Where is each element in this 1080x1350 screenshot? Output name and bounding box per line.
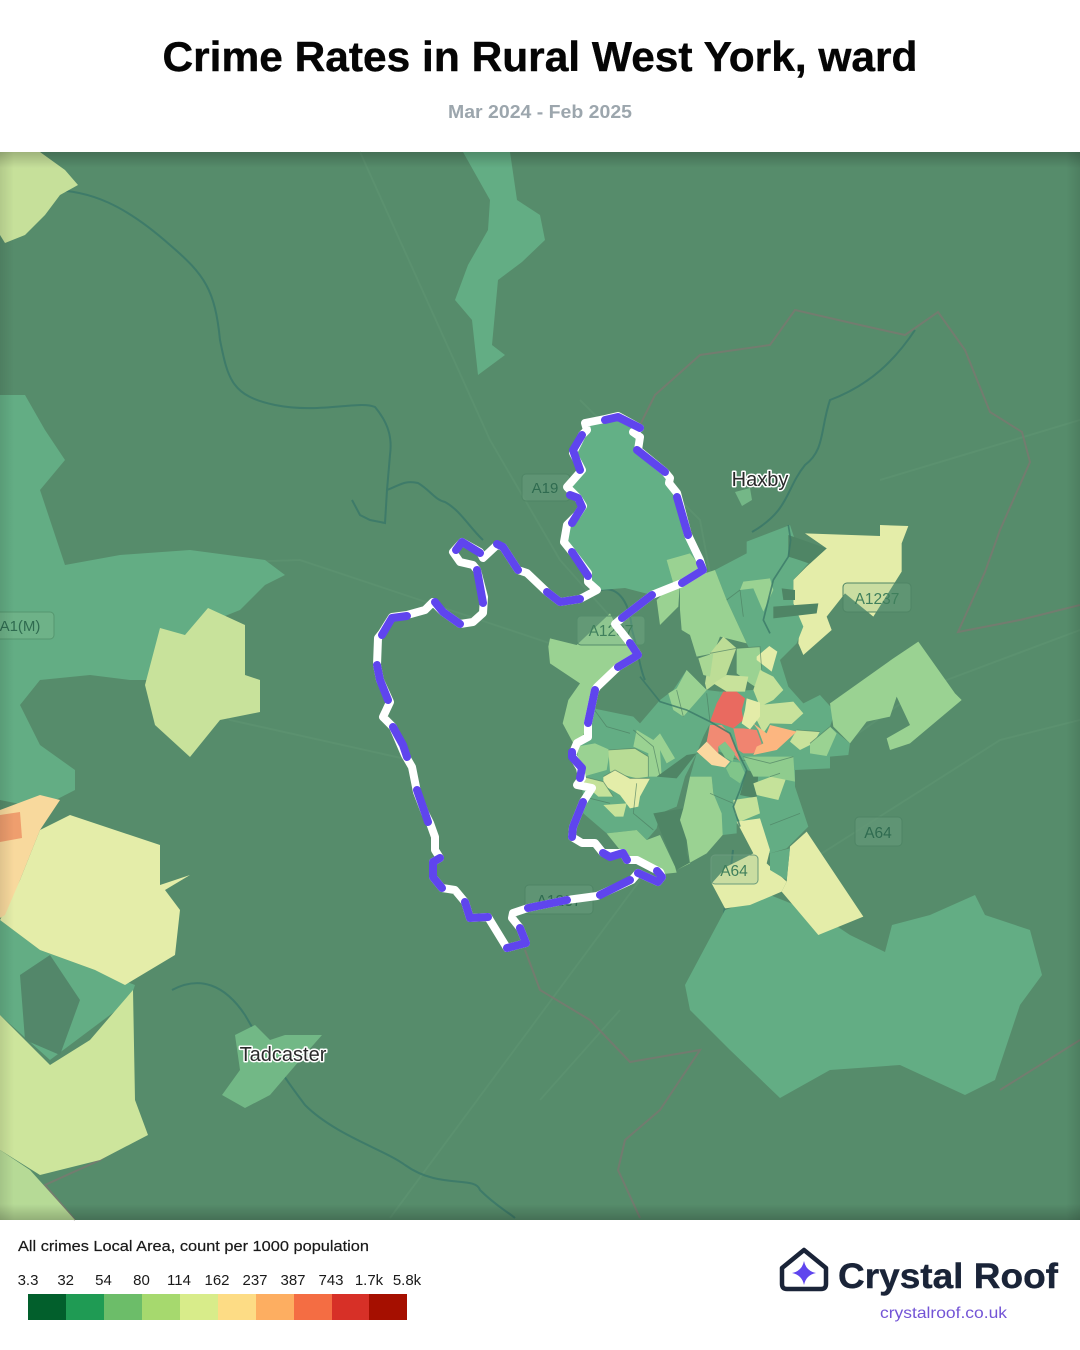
ward: north-west small light [698,653,713,677]
road label: A1237 west: A1237 [589,623,633,640]
road label: A64 east [855,817,902,846]
roads faint [0,152,1080,1218]
legend scale labels: 3.3 [18,1272,38,1289]
legend scale labels: 5.8k [393,1272,422,1289]
ward: centre west orange-red [707,725,740,762]
ward: north central [740,578,773,612]
ward: cluster lime small [713,675,748,692]
road label: A1237 south [525,885,593,914]
ward: south lime [733,797,760,822]
ward: east of centre light [757,702,803,733]
legend scale labels: 1.7k [355,1272,384,1289]
area: Haxby small patch [735,488,752,506]
legend scale labels: 387 [280,1272,306,1289]
area: south-west dark patches [20,955,80,1055]
icon: house with star [782,1250,826,1289]
ward: east small lime [790,730,820,750]
legend scale labels: 114 [167,1272,191,1289]
website link: crystalroof.co.uk [880,1305,1008,1322]
city river [640,525,791,827]
legend scale labels [18,1272,422,1289]
ward: city green west [575,670,720,840]
ward: south yellow east [782,832,863,935]
ward: north-east yellow [793,525,908,655]
ward: north central light [737,647,762,690]
area: north strip green [455,152,545,375]
area: south-east large green [685,895,1042,1098]
road label: A1(M) [0,612,54,639]
area: far-west peach [0,795,60,918]
ward: north-east of centre [753,670,783,707]
ward: centre peach [697,742,730,767]
ward: north light green [680,570,747,657]
area: far-west yellow [0,815,190,985]
ward: east orange [753,723,797,755]
city of York wards [548,525,962,935]
area: target ward [564,416,703,595]
legend scale labels: 80 [133,1272,150,1289]
road label: A64 south [711,855,758,884]
place label: Haxby: Haxby [732,469,788,491]
ward: centre east orange-red [733,728,762,753]
ward: south-centre lime [753,773,787,800]
ward: west cluster lime [608,748,648,778]
map vignette [0,152,1080,1220]
road label: A1(M): A1(M) [0,618,40,635]
area: south-west green [0,920,135,1060]
legend scale labels: 162 [204,1272,230,1289]
logo: Crystal Roof [782,1250,1058,1322]
ward: city green south [690,753,808,853]
ward: centre red [710,692,745,728]
ward: centre-south light [743,757,795,782]
road label: A19 [522,474,570,501]
ward: south of centre green [726,762,745,783]
ward: north-west of centre [668,670,707,717]
ward: north small light green [657,553,700,625]
area: top-left light green [0,152,78,243]
ward: east light [810,727,837,756]
road label: A1237 south: A1237 [537,893,581,910]
title: Crime Rates in Rural West York, ward [162,33,918,80]
ward: south-west light green [607,830,677,874]
ward: south central light green [677,777,723,870]
ward: south-west dark gap [653,808,690,870]
rivers [0,190,915,1218]
ward: west side light [577,743,610,777]
ward: east light green [830,642,962,750]
subtitle: date range: Mar 2024 - Feb 2025 [448,102,632,122]
road label: A64 south: A64 [720,863,748,880]
place label: Tadcaster: Tadcaster [240,1044,327,1066]
ward: small yellow north [757,646,777,672]
ward: west cluster lime bottom [603,803,627,817]
ward boundary: white and purple dashes [377,416,703,948]
ward: centre yellow [742,698,760,729]
map base [0,152,1080,1220]
area: south-west lime [0,990,148,1175]
road label: A1237 west [577,616,645,645]
area: west large green [0,395,285,808]
ward: north central lime [705,637,737,690]
legend scale labels: 54 [95,1272,112,1289]
road label: A19: A19 [532,480,558,497]
area: bottom-left lime [0,1150,75,1220]
area: west lime block [145,608,260,757]
logo wordmark: Crystal Roof [838,1257,1058,1296]
ward: west cluster lime left [583,777,613,797]
legend scale labels: 743 [318,1272,344,1289]
legend colour swatches [28,1294,407,1320]
ward: south yellow west [712,818,787,908]
area: Tadcaster green [222,1025,322,1108]
legend title: All crimes Local Area, count per 1000 population [18,1238,369,1255]
ward: central-west light [633,730,675,777]
legend scale labels: 32 [57,1272,74,1289]
ward: dark gaps [740,535,827,798]
ward: south green inlay [770,848,790,880]
area: far-west orange [0,812,22,842]
ward: centre green pocket [718,742,735,762]
road label: A64 east: A64 [864,825,892,842]
ward: dark wedge [657,753,697,778]
ward: city green north [707,525,850,770]
boundary lines [45,310,1080,1220]
ward outlines [583,590,830,830]
ward: west light green [548,613,637,743]
road label: A1237 east [843,583,911,612]
road label: A1237 east: A1237 [855,591,899,608]
legend [18,1238,422,1320]
ward: west cluster yellow [603,770,650,808]
legend scale labels: 237 [242,1272,268,1289]
panel: choropleth map [0,152,1080,1220]
